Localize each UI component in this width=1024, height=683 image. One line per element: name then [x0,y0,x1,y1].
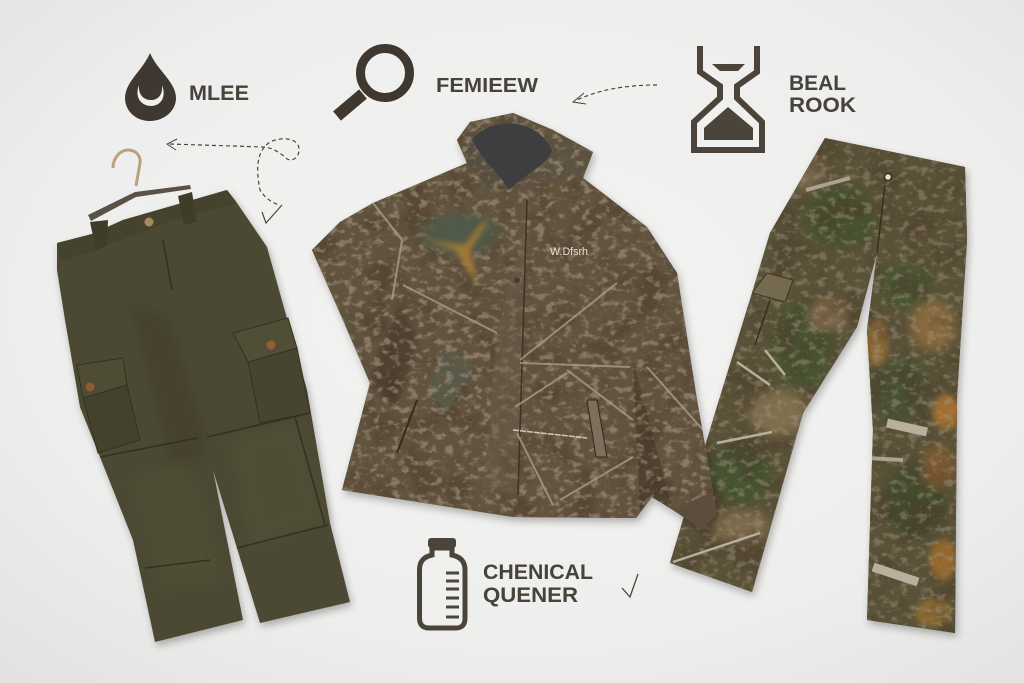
placket [484,243,524,487]
icon: water drop with label MLEE [125,53,249,121]
jacket logo: W.Dfsrh [550,246,588,258]
cargo pocket flap [752,273,793,302]
arrow: dashed curve towards left trousers [167,139,299,223]
pockets [397,400,417,453]
icon: hourglass with label BEAL ROOK [694,46,856,150]
garment: camouflage trousers [660,130,980,640]
seams [373,203,703,505]
hanger [88,150,191,221]
icon: hourglass with label BEAL ROOK: ROOK [789,94,856,117]
hood collar [518,142,592,186]
trouser folds [130,300,207,500]
icon: water drop with label MLEE: MLEE [189,82,249,105]
icon: chemical bottle with label: QUENER [483,584,578,607]
seams [100,240,328,568]
icon: magnifying glass with label FEMIEEW: FEMIEEW [436,74,539,97]
right cuff [673,492,717,530]
waist button [144,218,154,226]
hood lining [472,124,552,190]
icon: magnifying glass with label FEMIEEW [337,48,539,116]
left cuff [430,353,474,412]
garment: camouflage jacket [300,100,730,540]
left cargo pocket [77,358,140,453]
arrow: dashed curve towards jacket [573,85,657,104]
icon: hourglass with label BEAL ROOK: BEAL [789,72,846,95]
waistband and belt loops [57,190,237,262]
snap button [514,277,520,283]
icon: chemical bottle with label [420,538,593,628]
icon: chemical bottle with label: CHENICAL [483,561,593,584]
icon: check mark [622,574,638,597]
sleeve and body shading [633,362,673,510]
waist button [884,174,892,180]
right cargo pocket [233,318,310,423]
trousers body [57,190,350,642]
garment: olive trousers on hanger [57,150,350,642]
